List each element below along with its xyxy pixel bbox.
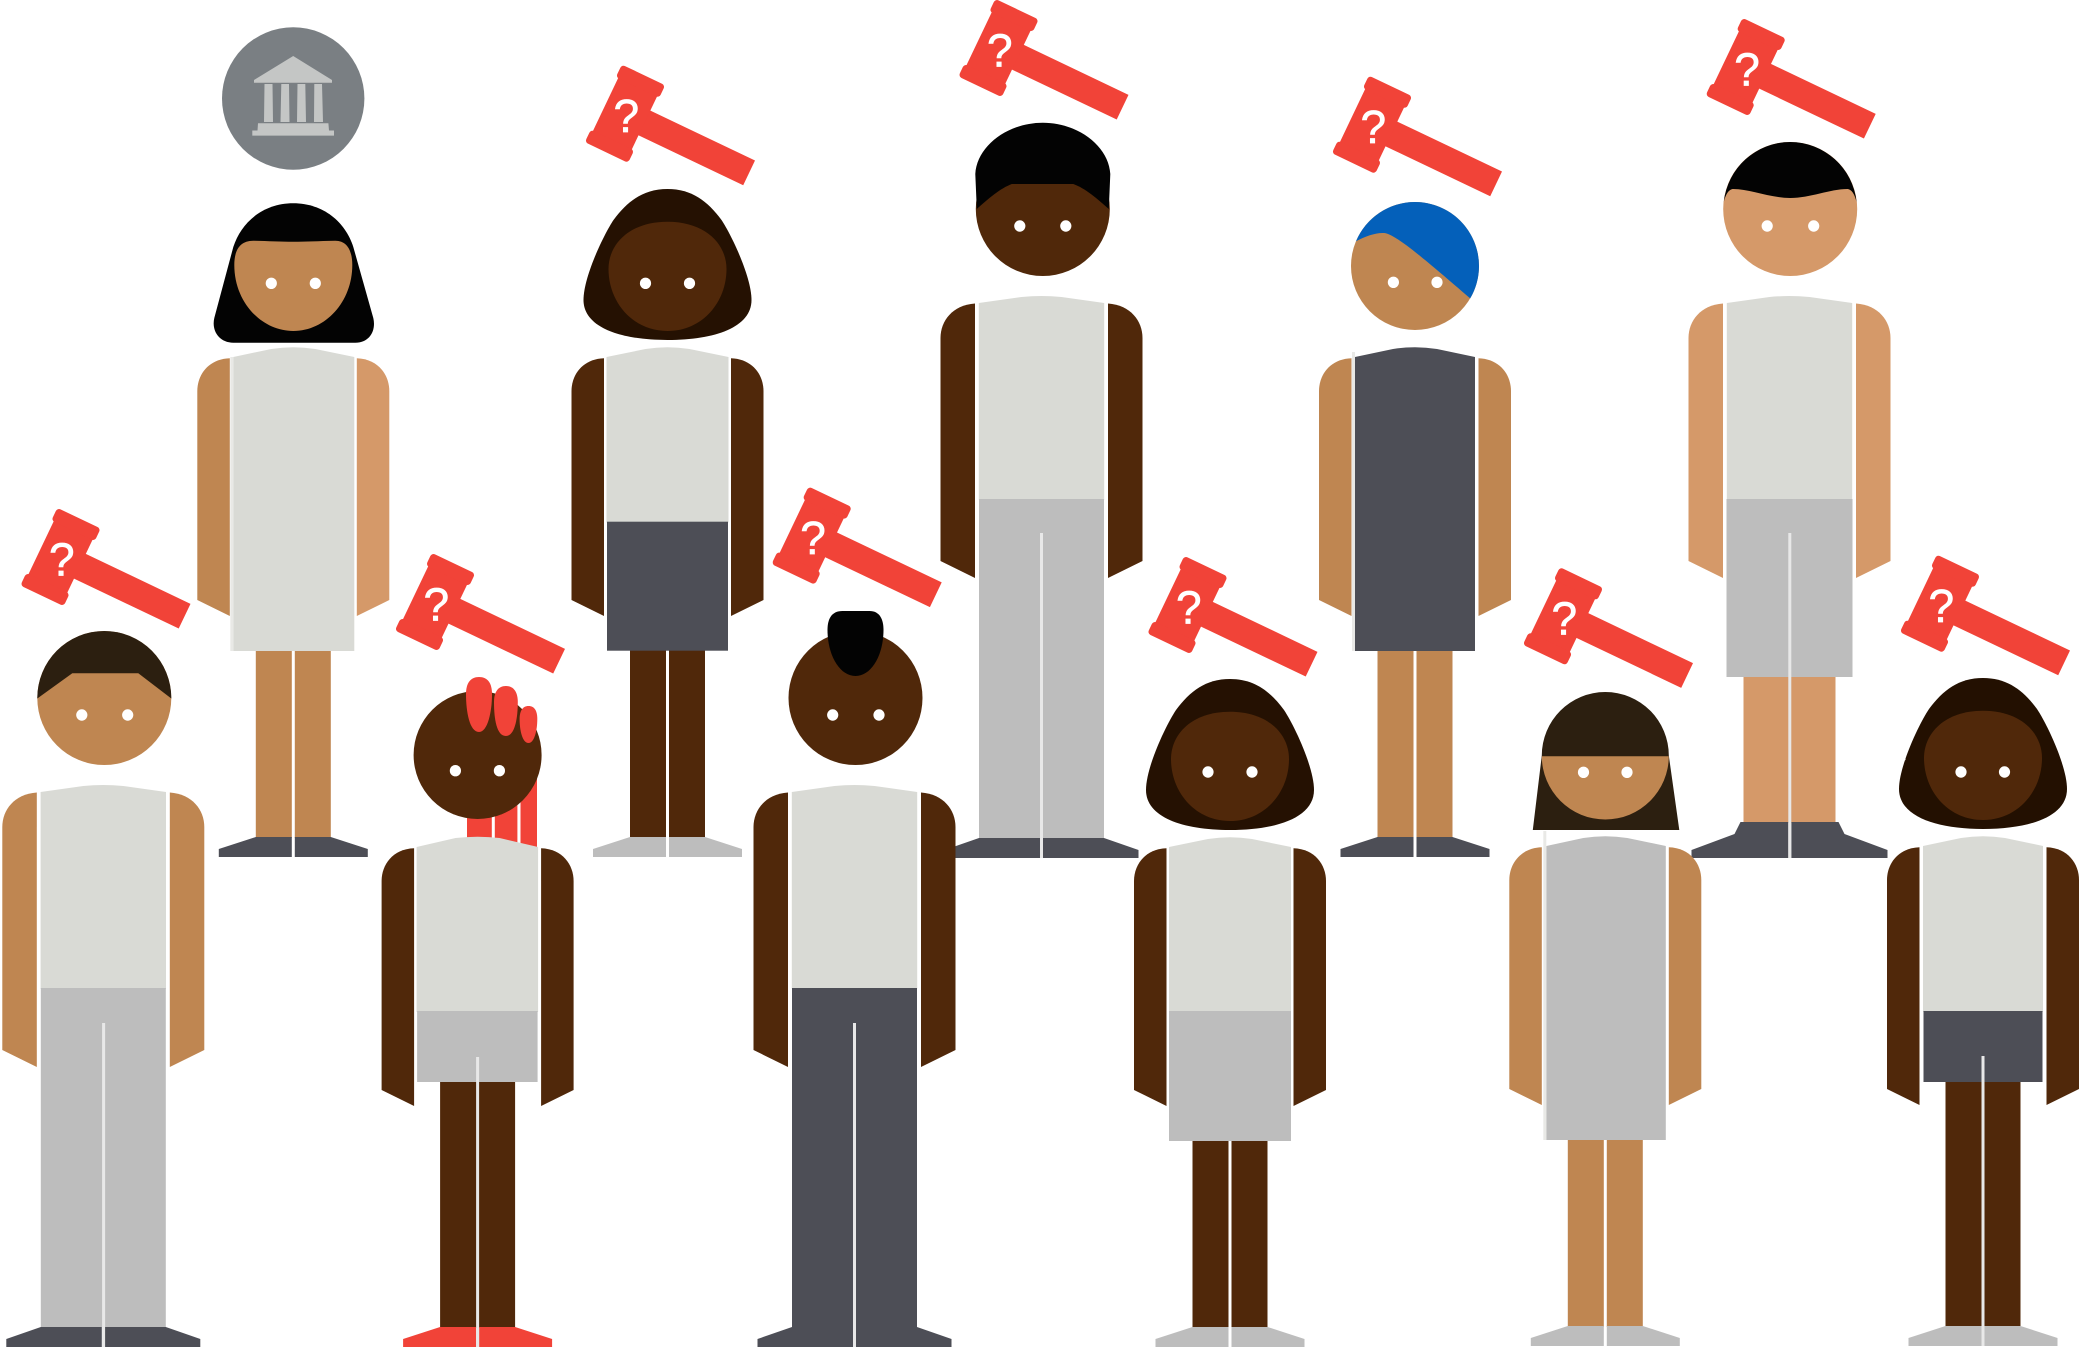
icon: gavel with question mark, above front-left man: ? <box>49 533 75 585</box>
icon: gavel with question mark, above red-braid person <box>395 553 578 700</box>
icon: gavel with question mark, above straight-hair woman: ? <box>1552 593 1577 645</box>
arms <box>1688 304 1890 578</box>
legs <box>256 647 331 838</box>
feet <box>593 837 742 857</box>
icon: gavel with question mark, above front-left man <box>20 508 203 655</box>
arms <box>940 304 1142 578</box>
icon: gavel with question mark, above bun person: ? <box>800 512 826 564</box>
skirt <box>607 522 728 651</box>
person: back row, tall man, grey trousers <box>940 123 1142 858</box>
arms <box>754 792 956 1067</box>
head with hijab <box>1146 679 1314 830</box>
shorts <box>1924 1011 2042 1082</box>
arms <box>197 358 389 616</box>
trousers <box>979 499 1104 838</box>
legs <box>1946 1076 2020 1327</box>
arms <box>572 358 764 616</box>
arms <box>1509 847 1701 1105</box>
icon: gavel with question mark, above front hijab woman: ? <box>1176 581 1202 633</box>
person: back row, tall man, shorts, light skin <box>1688 142 1890 858</box>
head with dark hair <box>37 631 171 765</box>
head with black hair <box>975 123 1110 276</box>
person: front row, black bun, slate trousers <box>754 611 956 1347</box>
person: front row, long straight hair, grey dress <box>1509 692 1701 1346</box>
person: front row, brown hijab, grey skirt <box>1134 679 1326 1347</box>
legs <box>1744 674 1836 823</box>
shirt <box>979 296 1104 500</box>
dress <box>1546 836 1666 1140</box>
shirt <box>417 837 538 1012</box>
legs <box>630 647 705 838</box>
red shoes <box>403 1327 552 1347</box>
feet <box>219 837 368 857</box>
person: front row, man, grey trousers <box>2 631 204 1347</box>
person: back row, blue turban, slate dress <box>1319 202 1511 857</box>
feet <box>1156 1327 1304 1347</box>
head <box>788 631 922 765</box>
icon: gavel with question mark, above front hijab woman <box>1147 556 1330 703</box>
head with blue turban <box>1351 202 1479 330</box>
icon: gavel with question mark, above back-row hijab woman: ? <box>614 90 639 142</box>
icon: gavel with question mark, above tall back-row man <box>958 0 1141 146</box>
icon: gavel with question mark, above turban person <box>1332 76 1515 223</box>
dress <box>233 347 354 651</box>
icon: gavel with question mark, above tall man with shorts <box>1706 18 1888 165</box>
shoes <box>6 1327 200 1347</box>
icon: gavel with question mark, above tall back-row man: ? <box>987 24 1013 76</box>
icon: gavel with question mark, above far-right hijab woman: ? <box>1929 580 1954 632</box>
trousers <box>41 988 166 1327</box>
icon: gavel with question mark, above back-row hijab woman <box>585 65 768 212</box>
shoes <box>758 1327 952 1347</box>
icon: gavel with question mark, above turban person: ? <box>1361 101 1386 153</box>
head with black hair <box>1723 142 1857 276</box>
person: front row, red braids, grey shorts <box>382 677 574 1347</box>
shirt <box>792 785 917 989</box>
head <box>414 691 542 819</box>
shoes <box>1692 822 1888 858</box>
head with straight hair <box>1533 692 1679 830</box>
shirt <box>41 785 166 989</box>
shirt <box>1727 296 1852 500</box>
icon: gavel with question mark, above tall man with shorts: ? <box>1734 43 1760 95</box>
head with hijab <box>1899 678 2067 829</box>
skirt <box>1169 1011 1291 1141</box>
feet <box>1908 1326 2058 1346</box>
arms <box>382 848 574 1106</box>
trousers <box>792 988 917 1327</box>
shirt <box>1923 836 2043 1012</box>
head with black hijab <box>214 203 374 343</box>
top <box>606 347 728 522</box>
feet <box>944 838 1138 858</box>
arms <box>1887 847 2079 1105</box>
red braids behind head <box>467 747 537 862</box>
top <box>1169 837 1291 1012</box>
icon: gavel with question mark, above red-braid person: ? <box>424 578 449 630</box>
shorts <box>1726 499 1852 677</box>
icon: gavel with question mark, above bun person <box>772 486 954 634</box>
legs <box>1568 1136 1643 1327</box>
person: back row, brown hijab, slate skirt <box>572 189 764 857</box>
icon: gavel with question mark, above far-right hijab woman <box>1900 555 2079 702</box>
black hair bun <box>828 611 884 676</box>
arms <box>1134 848 1326 1106</box>
arms <box>1319 358 1511 616</box>
feet <box>1531 1326 1680 1346</box>
shorts <box>417 1011 538 1082</box>
legs <box>1192 1137 1268 1328</box>
person: front row, brown hijab, slate shorts <box>1887 678 2079 1346</box>
head with hijab <box>584 189 752 340</box>
legs <box>440 1077 515 1328</box>
icon: gavel with question mark, above straight-hair woman <box>1523 567 1706 714</box>
red hair buns on head <box>466 677 537 743</box>
feet <box>1340 837 1490 857</box>
arms <box>2 792 204 1067</box>
person: back row, black hijab, long grey dress <box>197 203 389 857</box>
icon: institution building in grey circle <box>222 27 364 170</box>
dress <box>1355 347 1475 651</box>
legs <box>1378 647 1452 838</box>
